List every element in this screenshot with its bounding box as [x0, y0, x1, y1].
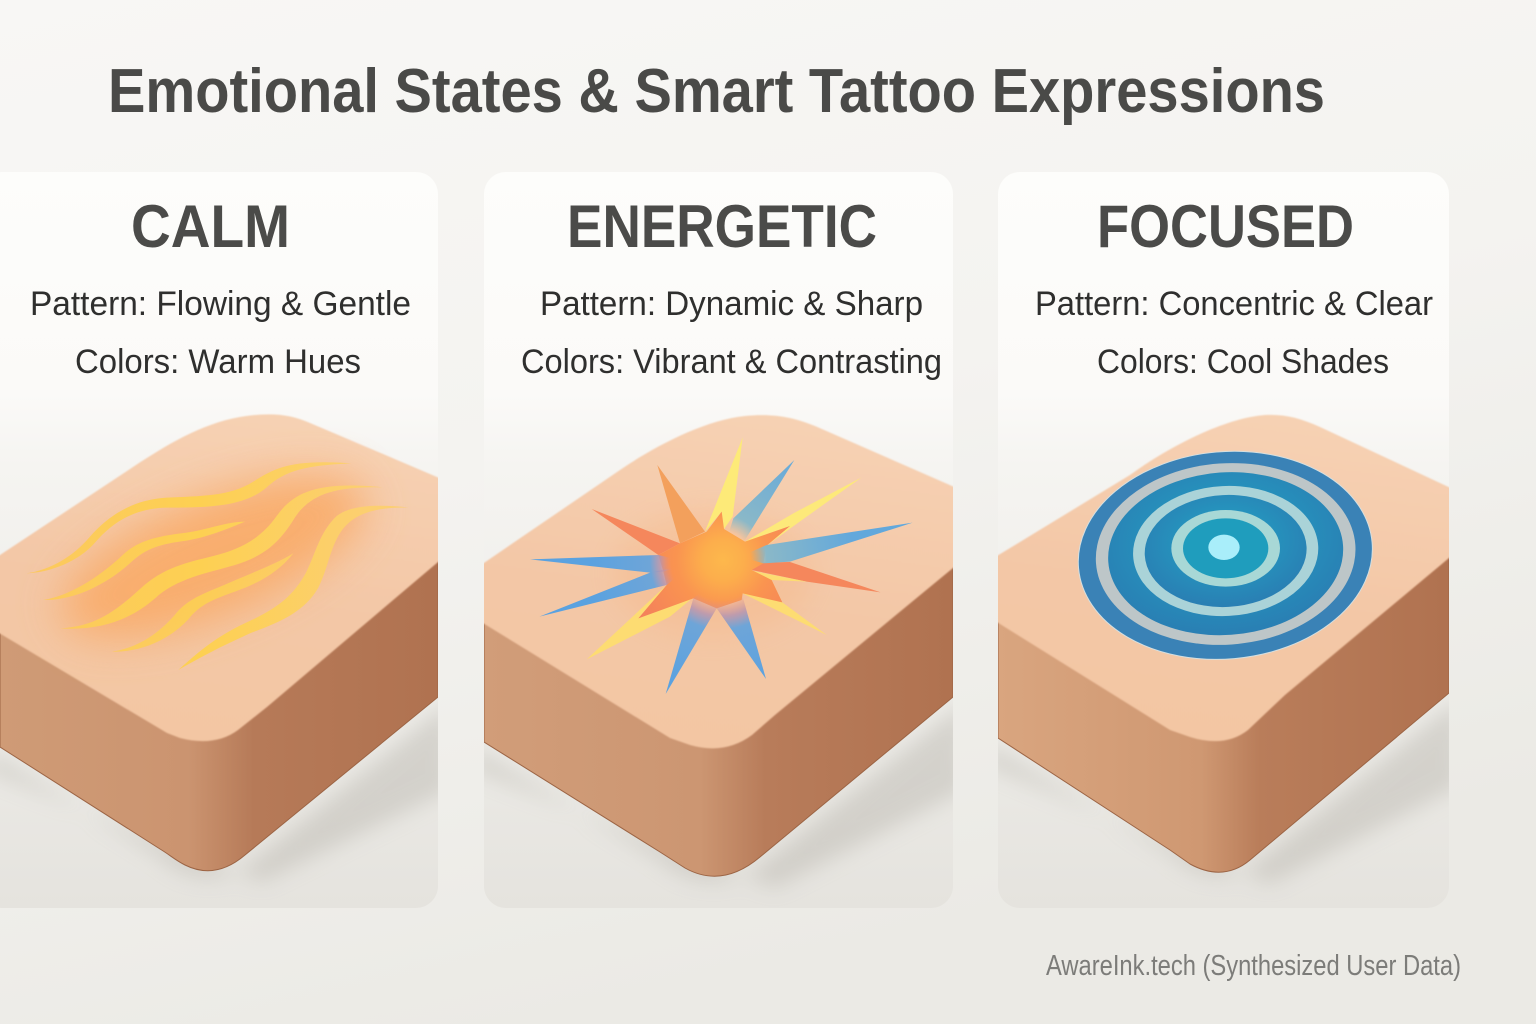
- skin block: calm: [0, 414, 450, 882]
- heading: focused: FOCUSED: [1097, 193, 1354, 260]
- colors text: energetic: Colors: Vibrant & Contrasting: [521, 343, 942, 381]
- skin block: energetic: [474, 415, 965, 888]
- tattoo: flowing waves: [27, 441, 408, 672]
- colors text: focused: Colors: Cool Shades: [1097, 343, 1389, 381]
- pattern text: calm: Pattern: Flowing & Gentle: [30, 285, 411, 323]
- panel: energetic: [474, 172, 965, 908]
- panel: focused: [988, 172, 1460, 908]
- pattern text: energetic: Pattern: Dynamic & Sharp: [540, 285, 923, 323]
- panel: calm: [0, 172, 450, 908]
- title: Emotional States & Smart Tattoo Expressions: [108, 57, 1325, 126]
- heading: energetic: ENERGETIC: [567, 193, 877, 260]
- tattoo: starburst: [530, 437, 913, 694]
- colors text: calm: Colors: Warm Hues: [75, 343, 361, 381]
- heading: calm: CALM: [131, 193, 290, 260]
- skin block: focused: [988, 415, 1460, 884]
- tattoo: concentric rings: [1078, 450, 1373, 660]
- pattern text: focused: Pattern: Concentric & Clear: [1035, 285, 1433, 323]
